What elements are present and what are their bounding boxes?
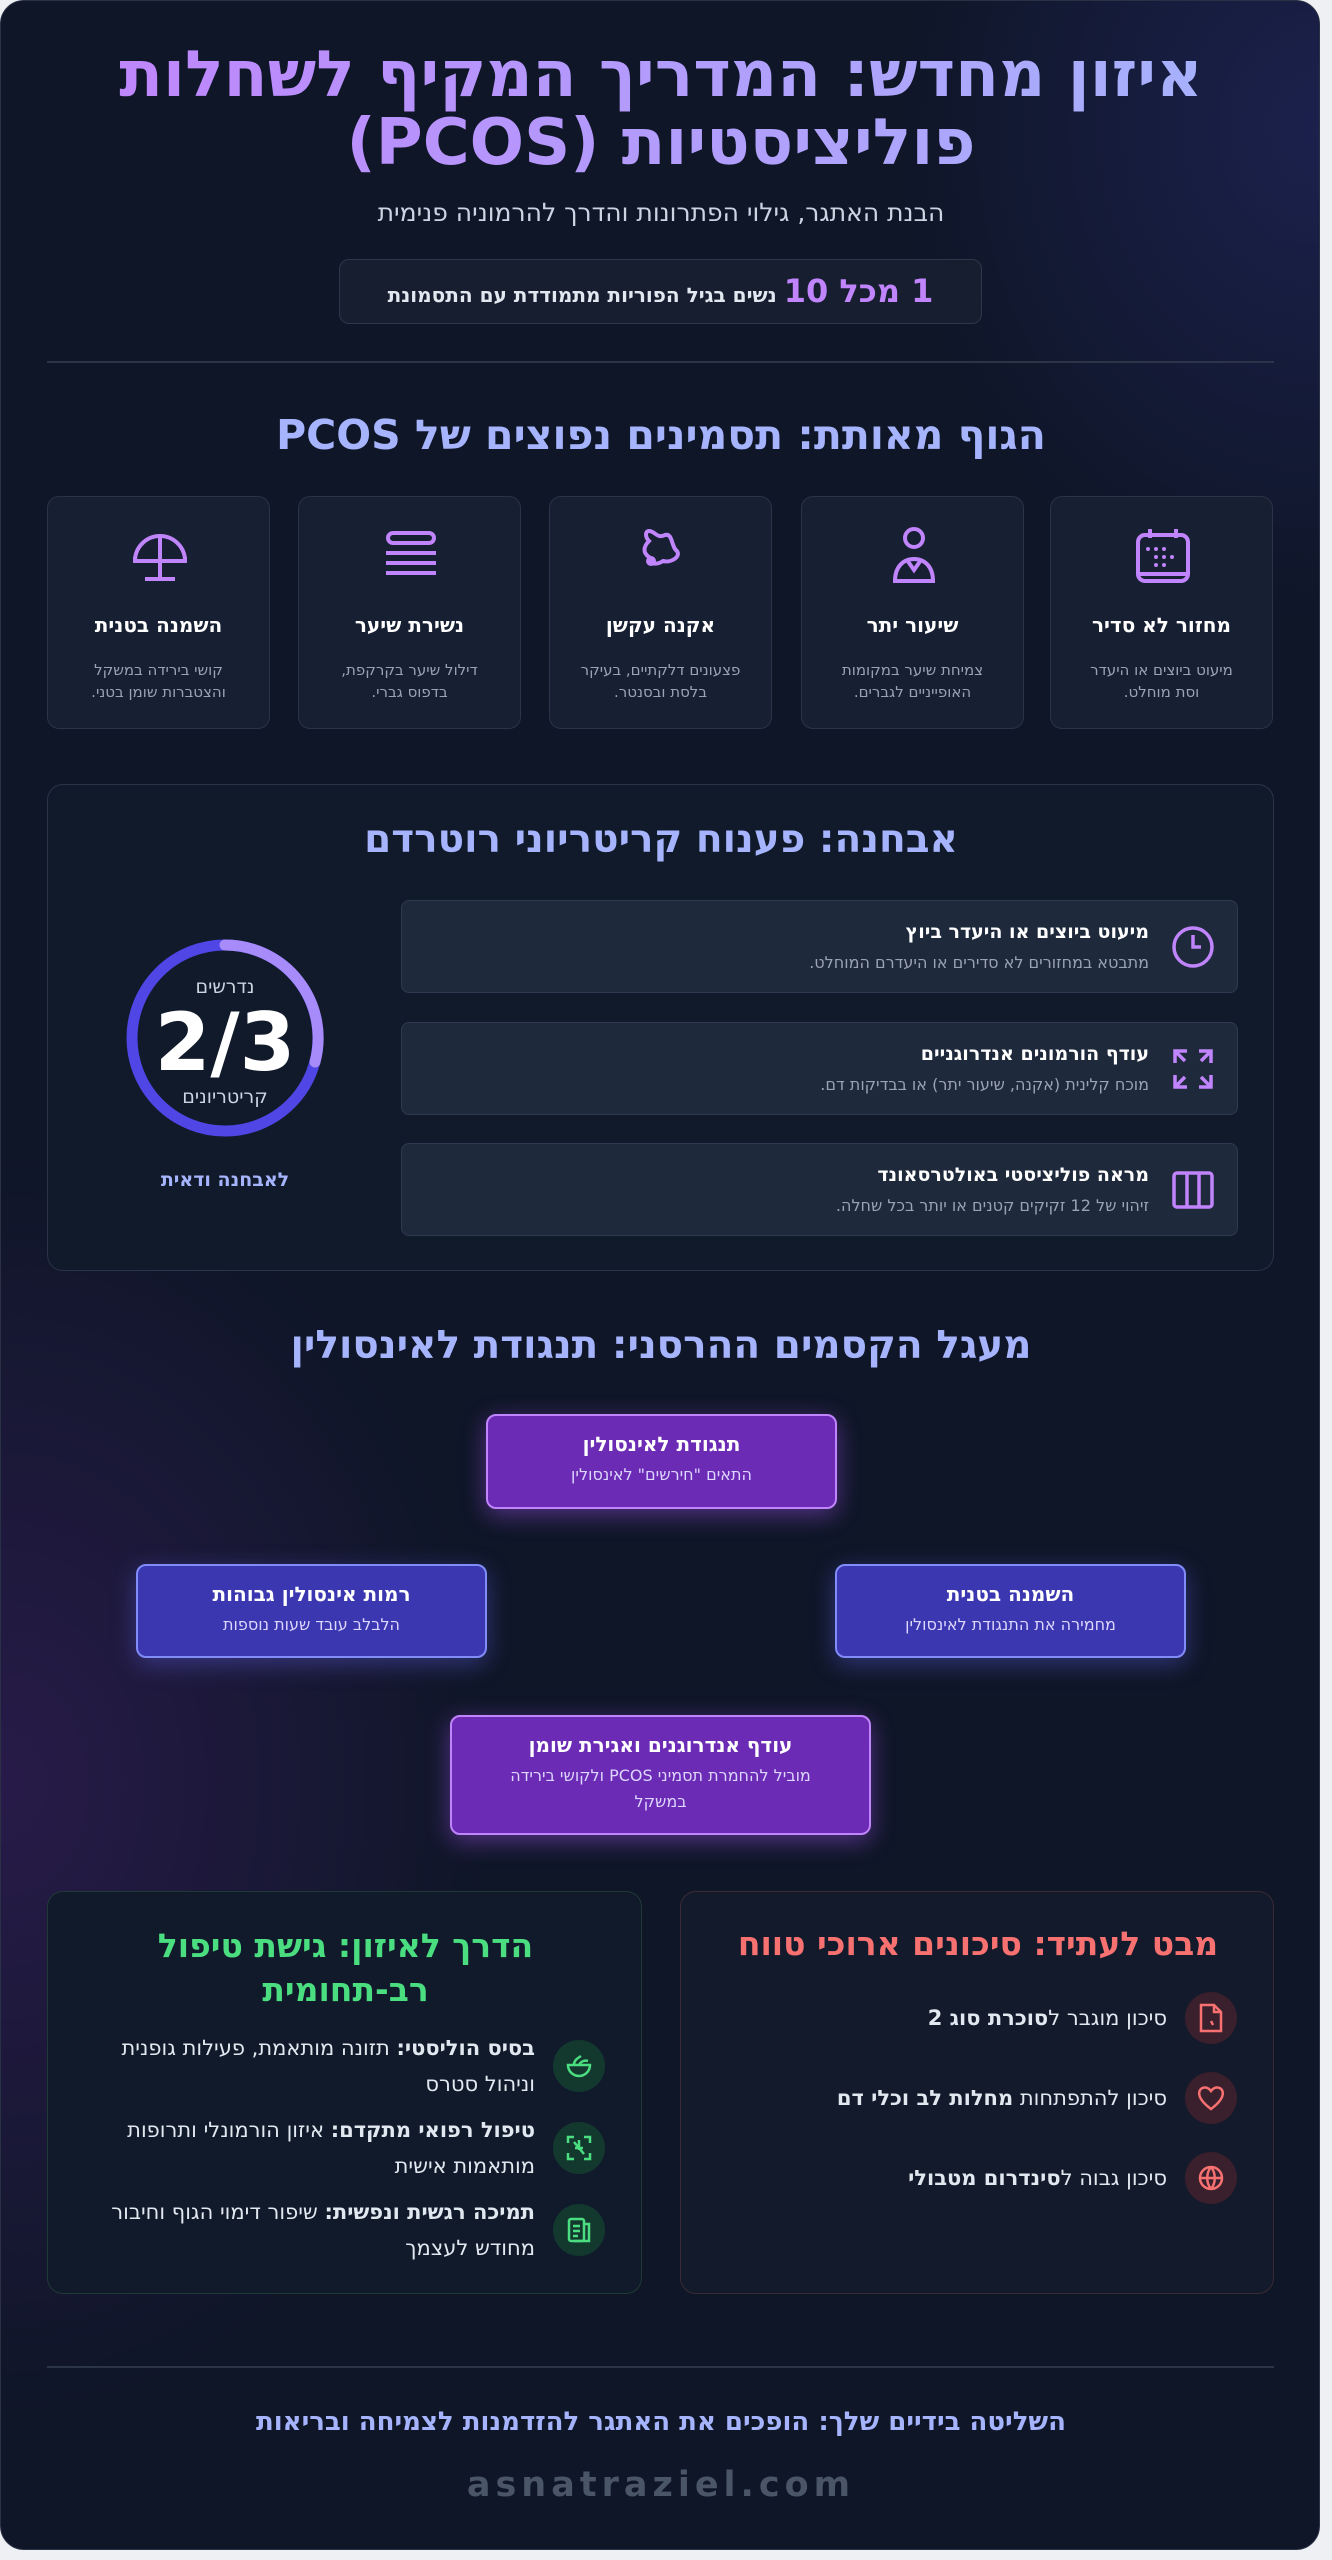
footer url: asnatraziel.com — [467, 2465, 855, 2505]
heading: diagnosis: אבחנה: פענוח קריטריוני רוטרדם — [364, 817, 958, 862]
ring caption: לאבחנה ודאית — [161, 1169, 289, 1191]
subtitle: הבנת האתגר, גילוי הפתרונות והדרך להרמוניה פנימית — [378, 198, 944, 227]
criterion 1: מתבטא במחזורים לא סדירים או היעדרם המוחלט. — [809, 953, 1149, 972]
chart: 2/3 ring: נדרשים — [195, 976, 255, 998]
node: insulin resistance: תנגודת לאינסולין — [583, 1432, 740, 1456]
symptom card: acne: אקנה עקשן — [606, 613, 715, 637]
symptom card: abdominal obesity: קושי בירידה במשקל והצטברות שומן בטני. — [91, 661, 226, 701]
symptom card: irregular cycle: מיעוט ביוצים או היעדר וסת מוחלט. — [1090, 661, 1233, 701]
criterion 3: מראה פוליציסטי באולטרסאונד — [877, 1164, 1149, 1186]
risk: metabolic: סיכון גבוה לסינדרום מטבולי — [908, 2166, 1167, 2190]
symptom card: hirsutism — [801, 496, 1024, 729]
node: high insulin — [136, 1564, 487, 1658]
symptom card: abdominal obesity — [47, 496, 270, 729]
risk: diabetes — [928, 1992, 1237, 2044]
heading: treatment: הדרך לאיזון: גישת טיפול רב-תחומית — [158, 1926, 533, 2009]
heading: risks: מבט לעתיד: סיכונים ארוכי טווח — [738, 1924, 1218, 1963]
risk: heart — [837, 2072, 1237, 2124]
stat box: 1 מכל 10 נשים בגיל הפוריות מתמודדת עם התסמונת — [388, 272, 933, 310]
footer tagline: השליטה בידיים שלך: הופכים את האתגר להזדמנות לצמיחה ובריאות — [256, 2407, 1066, 2437]
panel: treatment — [47, 1891, 642, 2294]
node: insulin resistance — [486, 1414, 837, 1509]
symptom card: irregular cycle: מחזור לא סדיר — [1092, 613, 1231, 637]
node: high insulin: הלבלב עובד שעות נוספות — [223, 1615, 400, 1634]
symptom card: hair loss: נשירת שיער — [355, 613, 464, 637]
criterion 2 — [401, 1022, 1238, 1115]
criterion 2: מוכח קלינית (אקנה, שיעור יתר) או בבדיקות דם. — [820, 1075, 1149, 1094]
chart: 2/3 ring: 2/3 — [155, 996, 295, 1089]
symptom card: acne — [549, 496, 772, 729]
title: איזון מחדש: המדריך המקיף לשחלות פוליציסטיות (PCOS) — [119, 38, 1203, 180]
heading: insulin cycle: מעגל הקסמים ההרסני: תנגודת לאינסולין — [291, 1323, 1031, 1368]
heading: symptoms: הגוף מאותת: תסמינים נפוצים של PCOS — [276, 411, 1046, 459]
symptom card: hair loss — [298, 496, 521, 729]
node: androgen excess: במשקל — [635, 1792, 686, 1811]
symptom card: hirsutism: צמיחת שיער במקומות האופייניים לגברים. — [842, 661, 983, 701]
node: androgen excess: מוביל להחמרת תסמיני PCOS ולקושי בירידה — [510, 1766, 811, 1785]
symptom card: acne: פצעונים דלקתיים, בעיקר בלסת ובסנטר. — [581, 661, 740, 701]
criterion 1: מיעוט ביוצים או היעדר ביוץ — [906, 921, 1149, 943]
node: insulin resistance: התאים "חירשים" לאינסולין — [571, 1465, 752, 1484]
treatment: holistic: בסיס הוליסטי: תזונה מותאמת, פעילות גופנית וניהול סטרס — [122, 2036, 535, 2096]
chart: 2/3 ring — [126, 940, 324, 1136]
treatment: medical: טיפול רפואי מתקדם: איזון הורמונלי ותרופות מותאמות אישית — [127, 2118, 535, 2178]
node: abdominal obesity — [835, 1564, 1186, 1658]
symptom card: hair loss: דילול שיער בקרקפת, בדפוס גברי. — [341, 661, 478, 701]
symptom card: irregular cycle — [1050, 496, 1273, 729]
risk: heart: סיכון להתפתחות מחלות לב וכלי דם — [837, 2086, 1167, 2110]
criterion 2: עודף הורמונים אנדרוגניים — [921, 1043, 1149, 1065]
symptom card: abdominal obesity: השמנה בטנית — [95, 613, 222, 637]
node: abdominal obesity: השמנה בטנית — [947, 1582, 1074, 1606]
treatment: emotional: תמיכה רגשית ונפשית: שיפור דימוי הגוף וחיבור מחודש לעצמך — [111, 2200, 535, 2260]
panel: diagnosis — [47, 784, 1274, 1271]
risk: diabetes: סיכון מוגבר לסוכרת סוג 2 — [928, 2006, 1167, 2030]
risk: metabolic — [908, 2152, 1237, 2204]
node: abdominal obesity: מחמירה את התנגודת לאינסולין — [905, 1615, 1116, 1634]
criterion 3: זיהוי של 12 זקיקים קטנים או יותר בכל שחלה. — [836, 1196, 1149, 1215]
criterion 1 — [401, 900, 1238, 993]
stat box — [339, 259, 982, 324]
node: androgen excess: עודף אנדרוגנים ואגירת שומן — [529, 1733, 792, 1757]
criterion 3 — [401, 1143, 1238, 1236]
node: androgen excess — [450, 1715, 871, 1835]
chart: 2/3 ring: קריטריונים — [182, 1086, 268, 1108]
node: high insulin: רמות אינסולין גבוהות — [212, 1582, 411, 1606]
panel: long-term risks — [680, 1891, 1274, 2294]
symptom card: hirsutism: שיעור יתר — [867, 613, 958, 637]
